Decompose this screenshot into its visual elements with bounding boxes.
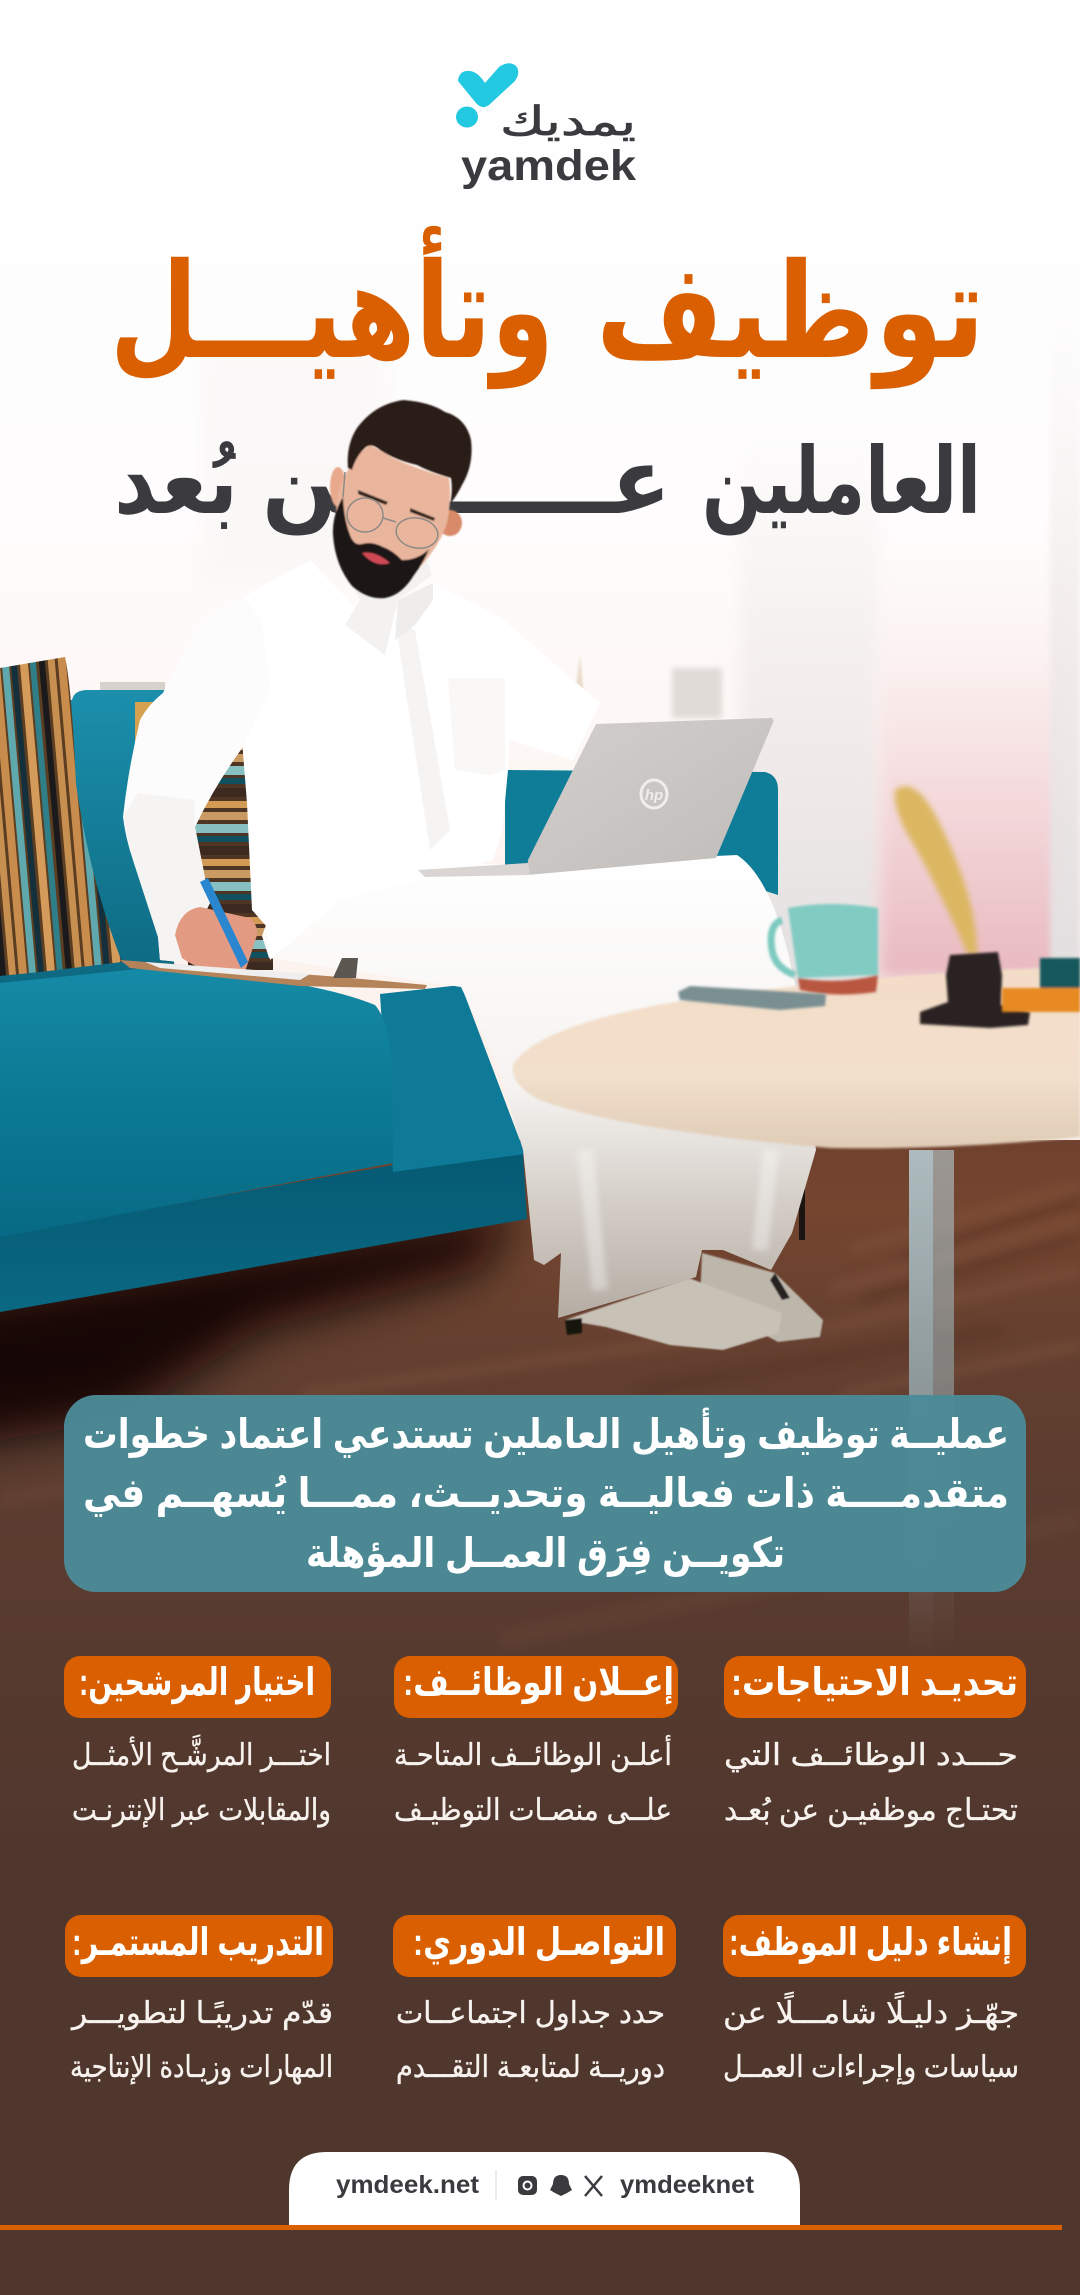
step line 2: دوريــة لمتابعـة التقـــدم	[396, 2051, 665, 2085]
icon: check mark	[458, 63, 518, 107]
striped left pillow	[0, 657, 122, 976]
subtitle	[114, 431, 981, 536]
social handle: ymdeeknet	[620, 2171, 755, 2199]
orange baseline	[0, 2225, 1062, 2230]
step line 1: جهّـز دليـلًا شامـــلًا عن	[723, 1991, 1019, 2031]
eyebrows	[358, 490, 435, 521]
clipboard	[120, 958, 427, 989]
step line 1: اختـــر المرشَّـح الأمثــل	[72, 1734, 331, 1773]
footer tab	[289, 2152, 800, 2225]
icon: logo dot	[456, 106, 478, 128]
icon: snapchat	[550, 2175, 572, 2196]
title	[110, 226, 985, 390]
sofa base	[0, 1154, 527, 1312]
logo latin wordmark: yamdek	[461, 142, 636, 190]
sleeve cuff	[123, 793, 210, 962]
step: identify needs	[724, 1656, 1026, 1828]
feather	[895, 786, 977, 955]
thobe torso	[200, 560, 600, 960]
sofa right backrest	[505, 770, 778, 895]
subtitle: العاملين	[702, 431, 981, 536]
head	[330, 400, 472, 598]
footer	[289, 2152, 800, 2225]
website: ymdeek.net	[336, 2171, 480, 2199]
chair leg	[799, 1185, 805, 1240]
step line 1: حدد جداول اجتماعــات	[396, 1997, 665, 2031]
logo	[456, 63, 636, 190]
phone	[678, 986, 826, 1010]
shoes	[565, 1253, 823, 1350]
step line 2: علــى منصـات التوظيـف	[394, 1794, 672, 1827]
laptop screen	[527, 718, 773, 875]
step line 1: قدّم تدريبًـا لتطويـــر	[70, 1997, 333, 2030]
icon: instagram	[518, 2176, 537, 2195]
hand with pen	[175, 878, 257, 972]
step heading: التدريب المستمـر:	[72, 1922, 324, 1964]
striped back pillow	[135, 702, 273, 970]
person	[123, 400, 823, 1350]
collar	[395, 583, 433, 640]
sofa main cushion	[0, 969, 393, 1237]
step line 2: المهارات وزيـادة الإنتاجية	[70, 2051, 333, 2085]
step: job posting	[394, 1656, 678, 1827]
intro line 3: تكويــن فِرَق العمــل المؤهلة	[306, 1530, 785, 1577]
step line 2: تحتـاج موظفيـن عن بُعـد	[724, 1794, 1018, 1828]
mug body	[788, 904, 878, 978]
step heading: تحديـد الاحتياجات:	[731, 1662, 1018, 1704]
neck and inner collar	[340, 540, 432, 655]
background room	[0, 0, 1080, 1160]
step heading: إعــلان الوظائــف:	[403, 1662, 674, 1705]
laptop logo letters: hp	[645, 787, 663, 804]
mouth	[362, 552, 390, 564]
icon: x	[585, 2176, 602, 2196]
step line 1: أعلـن الوظائــف المتاحـة	[394, 1734, 672, 1772]
step line 2: والمقابلات عبر الإنترنـت	[72, 1794, 331, 1828]
laptop	[418, 718, 773, 877]
step: employee guide	[723, 1915, 1026, 2085]
books	[1002, 958, 1080, 1012]
intro line 2: متقدمــــة ذات فعاليــة وتحديــث، ممـــا يُسهــم في	[83, 1470, 1009, 1518]
step: regular communication	[393, 1915, 676, 2085]
hair	[348, 400, 472, 504]
floor	[0, 1140, 1080, 2295]
sofa	[0, 682, 778, 1312]
right ear	[438, 510, 462, 536]
table legs	[909, 1150, 954, 1655]
floor wood grain	[0, 1185, 1080, 1640]
subtitle: عـــــــــن	[262, 431, 671, 536]
subtitle: بُعد	[114, 431, 238, 533]
intro panel	[64, 1395, 1026, 1592]
thobe pocket	[448, 678, 505, 775]
logo arabic wordmark: يمديك	[500, 100, 636, 144]
laptop logo	[641, 780, 667, 808]
step: choosing candidates	[64, 1656, 331, 1828]
chin tuft	[365, 568, 378, 582]
mug	[771, 904, 878, 995]
sofa floor shadow	[0, 1205, 520, 1450]
mug base	[798, 975, 878, 995]
laptop base	[418, 863, 530, 877]
mug handle	[771, 920, 795, 975]
step line 2: سياسات وإجراءات العمــل	[723, 2051, 1019, 2085]
face	[336, 445, 450, 590]
thobe sleeve	[123, 597, 270, 962]
inkwell	[920, 952, 1030, 1028]
step heading: التواصـل الدوري:	[413, 1922, 665, 1965]
title: توظيف	[596, 238, 985, 390]
step: continuous training	[65, 1915, 333, 2085]
glasses	[343, 472, 440, 551]
title: وتأهيـــل	[110, 226, 554, 390]
sofa left backrest	[0, 690, 175, 990]
step heading: اختيار المرشحين:	[79, 1662, 315, 1704]
left ear	[330, 467, 346, 507]
step line 1: حـــدد الوظائــف التي	[724, 1739, 1018, 1773]
thobe placket shading	[395, 620, 450, 850]
table top	[513, 966, 1080, 1148]
thobe fold highlights	[585, 1150, 771, 1290]
sofa second cushion	[380, 985, 525, 1172]
thobe lower	[262, 855, 816, 1318]
beard	[333, 497, 429, 598]
